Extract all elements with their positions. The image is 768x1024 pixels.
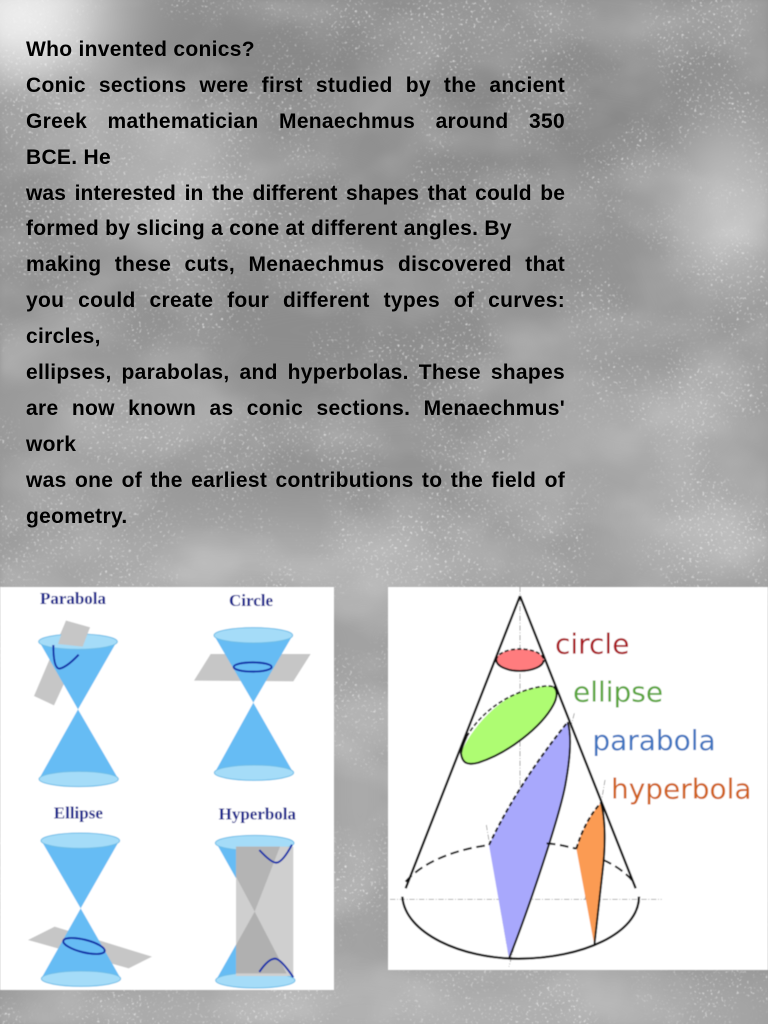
section: hyperbola fill xyxy=(576,803,605,945)
text block: who invented conics: formed by slicing a cone at different angles. By xyxy=(26,217,512,240)
labels: circle xyxy=(555,627,629,660)
diagram: ellipse xyxy=(28,804,152,986)
labels xyxy=(555,627,752,805)
text block: who invented conics: work xyxy=(26,433,76,456)
text block: who invented conics: ellipses, parabolas, and hyperbolas. These shapes xyxy=(26,361,565,384)
labels: parabola xyxy=(592,724,716,757)
cone axis lines xyxy=(390,587,662,967)
labels: hyperbola xyxy=(611,772,752,805)
diagram: parabola: Parabola xyxy=(40,589,107,608)
diagram: parabola xyxy=(34,589,118,787)
section: ellipse fill xyxy=(461,686,557,764)
cone outline xyxy=(402,596,639,959)
text block: who invented conics: BCE. He xyxy=(26,146,111,169)
text block: who invented conics: Who invented conics? xyxy=(26,38,255,61)
labels: ellipse xyxy=(573,676,663,709)
diagram: ellipse: Ellipse xyxy=(54,804,103,823)
diagram: hyperbola xyxy=(215,804,297,988)
text block: who invented conics: are now known as conic sections. Menaechmus' xyxy=(26,397,565,420)
panel: four conic sections xyxy=(0,587,334,990)
section: parabola fill xyxy=(489,722,570,959)
diagram: circle: Circle xyxy=(229,591,273,610)
text block: who invented conics: Greek mathematician Menaechmus around 350 xyxy=(26,110,565,133)
text block: who invented conics: you could create four different types of curves: xyxy=(26,289,565,312)
text block: who invented conics: geometry. xyxy=(26,505,128,528)
text block: who invented conics: was one of the earliest contributions to the field of xyxy=(26,469,565,492)
text block: who invented conics: Conic sections were first studied by the ancient xyxy=(26,74,565,97)
text block: who invented conics: circles, xyxy=(26,325,101,348)
text block: who invented conics: was interested in the different shapes that could be xyxy=(26,182,565,205)
diagram: hyperbola: Hyperbola xyxy=(219,804,297,823)
text block: who invented conics xyxy=(26,38,565,528)
panel: cone with labelled sections xyxy=(388,587,768,970)
text block: who invented conics: making these cuts, Menaechmus discovered that xyxy=(26,253,565,276)
diagram: circle xyxy=(194,591,311,780)
section: circle fill xyxy=(496,649,544,671)
